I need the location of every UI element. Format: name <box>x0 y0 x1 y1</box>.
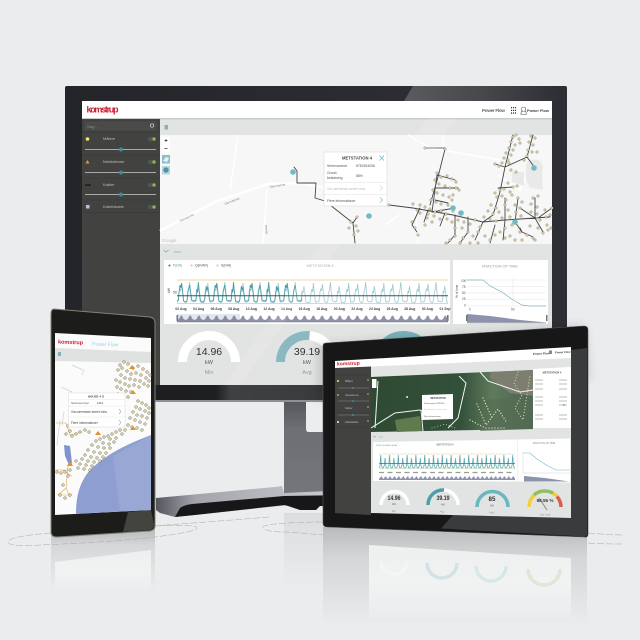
map popup: Grund- <box>327 171 338 175</box>
zoom control <box>162 137 170 154</box>
monitor <box>65 86 567 402</box>
tablet gauge: max <box>477 491 508 514</box>
x axis dates: 08 Aug <box>228 307 239 311</box>
tablet gauge: min <box>381 491 408 513</box>
tablet gauge: min: 14.96 <box>388 495 401 502</box>
user label: Power Flow <box>527 108 550 113</box>
tablet gauge: avg: 39.19 <box>436 495 450 502</box>
x axis dates: 30 Aug <box>422 307 433 311</box>
tablet sidebar: Netstationer <box>345 393 359 397</box>
phone water: lake <box>64 445 72 465</box>
phone map popup: Serienummer <box>71 401 89 405</box>
tablet gauge: max: kW <box>490 504 494 508</box>
map grey blocks <box>512 160 543 190</box>
x axis dates: 18 Aug <box>316 307 327 311</box>
collapse row <box>164 250 181 254</box>
x axis dates: 28 Aug <box>404 307 415 311</box>
monitor screen <box>82 101 552 385</box>
tablet line chart panel: P(kW) Q(kVAR) S(kVA) <box>376 444 397 447</box>
x axis dates: 12 Aug <box>263 307 275 311</box>
chart legend: S(kVA) <box>221 264 231 268</box>
tablet header title: Power Flow <box>533 351 550 356</box>
fraction axes: 100 <box>461 279 467 283</box>
fraction axes: 50 <box>462 291 466 295</box>
road labels <box>179 182 286 235</box>
gauge: min <box>182 336 236 376</box>
reflected gauges <box>381 561 560 585</box>
map popup: 8787654006 <box>356 164 375 168</box>
y axis: kW <box>167 287 171 293</box>
map popup: Via nærmeste street view <box>327 187 366 191</box>
stand cutout <box>306 402 330 432</box>
collapse row: mmi <box>174 250 181 254</box>
tablet line chart panel <box>373 440 517 482</box>
screen glare <box>225 101 470 385</box>
tablet zoom control <box>372 379 376 388</box>
tablet satellite map <box>371 370 533 432</box>
fraction axes: 75 <box>462 285 466 289</box>
phone map popup: HOUSE 4 G <box>88 394 105 398</box>
x axis dates: 10 Aug <box>246 307 257 311</box>
layer: meters <box>85 136 156 152</box>
tablet sidebar: Målere <box>345 379 353 383</box>
gauge: max <box>377 336 430 362</box>
tablet gauge: average load: Avg. load <box>540 512 551 516</box>
fraction title: FRACTION OF TIME <box>482 264 518 268</box>
phone water glare <box>113 435 151 512</box>
fraction axes: 0 <box>469 308 471 312</box>
gauge: avg <box>280 335 334 376</box>
chart legend: P(kW) <box>173 264 182 268</box>
icon: apps grid <box>511 107 516 114</box>
gauge: min: 14.96 <box>196 346 222 358</box>
fraction axes <box>455 279 515 312</box>
reflection: phone <box>51 526 155 592</box>
line chart panel <box>164 260 450 324</box>
gauge: min: kW <box>205 360 214 366</box>
map popup: Serienummer <box>327 164 348 168</box>
fraction navigator <box>466 314 548 323</box>
map popup: METSTATION 4 <box>342 156 373 160</box>
layer: cables <box>85 182 156 196</box>
tablet map popup: Flere informationer <box>424 415 441 418</box>
phone map popup: Via nærmeste street view <box>71 410 108 414</box>
map popup: belastning <box>327 176 343 180</box>
tablet fraction panel <box>518 438 570 482</box>
tablet content background <box>371 352 571 518</box>
chart legend <box>168 264 231 268</box>
x axis dates: 01 Sep <box>440 307 450 311</box>
dashed orbit rings <box>8 517 624 546</box>
road labels: Damvejsvej <box>269 182 286 189</box>
phone <box>51 309 155 537</box>
x axis dates: 24 Aug <box>369 307 380 311</box>
sidebar <box>82 119 160 385</box>
range navigator <box>176 314 449 322</box>
x axis dates: 26 Aug <box>387 307 398 311</box>
tablet sidebar: Kabelskabe <box>345 420 359 424</box>
road labels: Damvejsvej <box>179 212 195 223</box>
tablet gauge: avg: kW <box>441 504 445 506</box>
y axis <box>167 287 177 294</box>
tablet gauge: avg: Avg <box>440 510 445 514</box>
app header <box>82 101 552 120</box>
tablet map popup: Serienummer 8787654 <box>424 403 445 405</box>
tablet gauge: average load: 98.55 % <box>537 498 553 503</box>
phone water: sea <box>76 435 151 514</box>
tablet map popup: Via nærmeste street view <box>424 408 447 411</box>
monitor top glare <box>404 86 560 101</box>
needle <box>539 498 547 510</box>
phone title: Power Flow <box>92 342 119 348</box>
search box <box>85 122 156 130</box>
tablet collapse row <box>373 436 383 438</box>
phone station markers <box>67 365 136 466</box>
monitor chin <box>65 385 567 401</box>
map roads <box>160 135 530 244</box>
map <box>160 135 552 244</box>
phone logo: komstrup <box>58 340 84 346</box>
tablet gauge: average load <box>529 491 561 516</box>
layer: stations <box>85 159 156 174</box>
road labels: Damvejsvej <box>224 196 240 206</box>
stand base shadow <box>175 495 350 517</box>
tablet map popup <box>422 394 453 420</box>
search box: Søg... <box>87 124 98 129</box>
layer: cabinets: Kabelskabe <box>103 204 125 209</box>
x axis dates: 14 Aug <box>281 307 292 311</box>
map popup <box>324 152 387 206</box>
tablet detail panel: METSTATION 4 <box>543 370 562 374</box>
tablet logo: komstrup <box>337 361 360 367</box>
monitor bezel <box>65 86 567 401</box>
cable network <box>294 135 552 243</box>
chart series <box>177 280 448 305</box>
tablet gauge: min: Min <box>392 509 397 513</box>
fraction axes: % of time <box>455 284 459 298</box>
layer: stations: Netstationer <box>103 159 125 164</box>
phone map popup <box>68 393 125 427</box>
tablet fraction panel: FRACTION OF TIME <box>533 442 556 445</box>
tablet gauge: max: 85 <box>489 496 496 503</box>
tablet bezel glare <box>441 348 587 537</box>
monitor stand <box>156 400 350 517</box>
tablet gauge: min: kW <box>392 503 396 506</box>
x axis dates: 20 Aug <box>334 307 345 311</box>
x axis dates <box>175 307 450 311</box>
phone header <box>58 340 119 348</box>
y axis: 50 <box>173 290 177 294</box>
phone map roads <box>57 365 84 445</box>
fraction axes: 25 <box>462 297 466 301</box>
phone toolbar <box>55 348 151 363</box>
chart legend: Q(kVAR) <box>195 264 208 268</box>
map popup: 88% <box>356 174 363 178</box>
map type buttons <box>162 155 170 174</box>
icon: user <box>521 107 526 114</box>
gauge: min: Min <box>205 370 213 376</box>
phone screen <box>55 333 151 515</box>
stand base <box>156 486 350 517</box>
layer: cabinets <box>86 204 156 209</box>
tablet gauge: max: Max <box>490 510 495 514</box>
fraction of time panel <box>453 260 548 324</box>
tablet line chart panel: METSTATION 4 <box>436 444 454 446</box>
chart title: METSTATION 4 <box>306 264 334 268</box>
tablet <box>323 326 588 537</box>
fraction axes: 50 <box>511 308 515 312</box>
x axis dates: 06 Aug <box>211 307 222 311</box>
x axis dates: 02 Aug <box>175 307 187 311</box>
x axis dates: 22 Aug <box>351 307 363 311</box>
gauge: avg: 39.19 <box>294 346 320 358</box>
reflection: stand <box>284 513 324 588</box>
tablet header: Power Flow <box>555 350 571 354</box>
phone bezel glare <box>123 510 154 532</box>
fraction curve <box>467 280 546 306</box>
map toolbar <box>160 120 552 135</box>
x axis dates: 04 Aug <box>193 307 204 311</box>
stand neck <box>284 400 344 495</box>
tablet shadow <box>318 325 590 400</box>
map popup: Flere informationer <box>327 199 356 203</box>
tablet detail panel <box>533 367 571 428</box>
layer: meters: Målere <box>103 136 116 141</box>
logo: komstrup <box>86 104 119 114</box>
tablet map settlements <box>407 372 530 428</box>
gauge: avg: kW <box>303 360 312 366</box>
phone map popup: 1112 <box>97 401 104 405</box>
reflection: tablet <box>323 527 587 625</box>
phone meter clusters <box>55 362 150 498</box>
tablet body <box>323 326 588 537</box>
tablet sidebar: Kabler <box>345 406 353 410</box>
x axis dates: 16 Aug <box>299 307 310 311</box>
gauge: avg: Avg <box>302 370 312 376</box>
icon: close <box>380 156 384 160</box>
tablet map roads <box>371 372 533 431</box>
road labels: Hovvej <box>264 225 269 235</box>
tablet sidebar <box>335 365 371 515</box>
phone body <box>51 309 155 537</box>
layer: cables: Kabler <box>103 182 115 187</box>
google mark: Google <box>162 238 177 243</box>
tablet header <box>335 347 571 368</box>
tablet gauge: avg <box>428 490 458 514</box>
fraction axes: 0 <box>464 304 466 308</box>
phone map popup: Flere informationer <box>71 421 99 425</box>
station markers <box>290 165 537 225</box>
tablet map popup: METSTATION <box>430 397 446 400</box>
header title: Power Flow <box>482 108 505 113</box>
